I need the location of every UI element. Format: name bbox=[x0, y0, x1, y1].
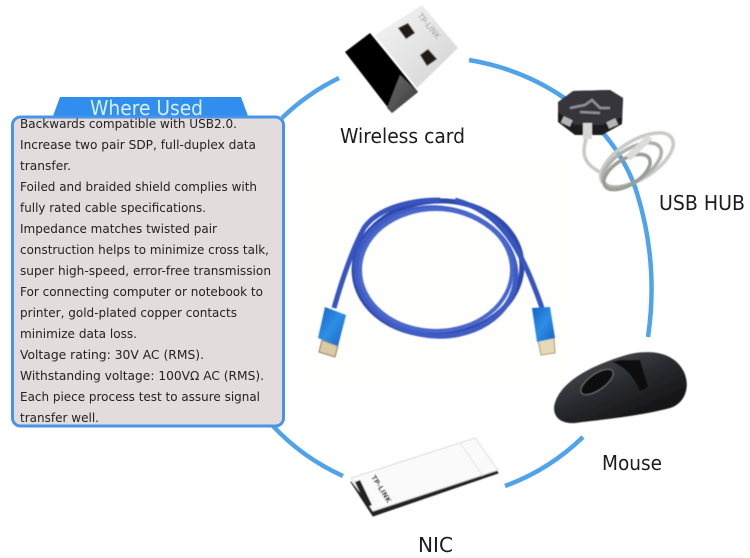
right USB connector bbox=[532, 307, 555, 355]
specification text: transfer. bbox=[20, 158, 71, 173]
specification text bbox=[20, 116, 271, 425]
specification text: printer, gold-plated copper contacts bbox=[20, 305, 237, 320]
specification text: Foiled and braided shield complies with bbox=[20, 179, 257, 194]
specification text: Increase two pair SDP, full-duplex data bbox=[20, 137, 256, 152]
specification text: Impedance matches twisted pair bbox=[20, 221, 218, 236]
heading tab bbox=[53, 96, 248, 120]
specification text: minimize data loss. bbox=[20, 326, 137, 341]
specification text: transfer well. bbox=[20, 410, 99, 425]
specification text: fully rated cable specifications. bbox=[20, 200, 206, 215]
label: NIC: NIC bbox=[418, 533, 453, 557]
specification text: Each piece process test to assure signal bbox=[20, 389, 260, 404]
icon: mouse bbox=[554, 352, 687, 423]
central photo backdrop bbox=[303, 150, 568, 380]
specification text: construction helps to minimize cross talk, bbox=[20, 242, 269, 257]
left USB connector bbox=[318, 307, 346, 357]
label: mouse: Mouse bbox=[602, 451, 662, 475]
specification text: Backwards compatible with USB2.0. bbox=[20, 116, 237, 131]
icon: wireless card dongle: TP-LINK bbox=[415, 11, 442, 41]
label: wireless card: Wireless card bbox=[340, 124, 465, 148]
heading tab: Where Used bbox=[90, 96, 203, 120]
specification text: For connecting computer or notebook to bbox=[20, 284, 263, 299]
specification text: super high-speed, error-free transmission bbox=[20, 263, 271, 278]
label: USB hub: USB HUB bbox=[659, 191, 745, 215]
icon: USB hub bbox=[558, 90, 682, 198]
specification text: Withstanding voltage: 100VΩ AC (RMS). bbox=[20, 368, 264, 383]
connecting ring arcs bbox=[272, 60, 652, 486]
specification text: Voltage rating: 30V AC (RMS). bbox=[20, 347, 204, 362]
icon: NIC adapter: TP-LINK bbox=[369, 474, 393, 505]
icon: USB cable bbox=[318, 195, 555, 357]
panel: where used bbox=[12, 96, 284, 426]
icon: wireless card dongle bbox=[345, 5, 458, 113]
icon: NIC adapter bbox=[351, 438, 498, 516]
